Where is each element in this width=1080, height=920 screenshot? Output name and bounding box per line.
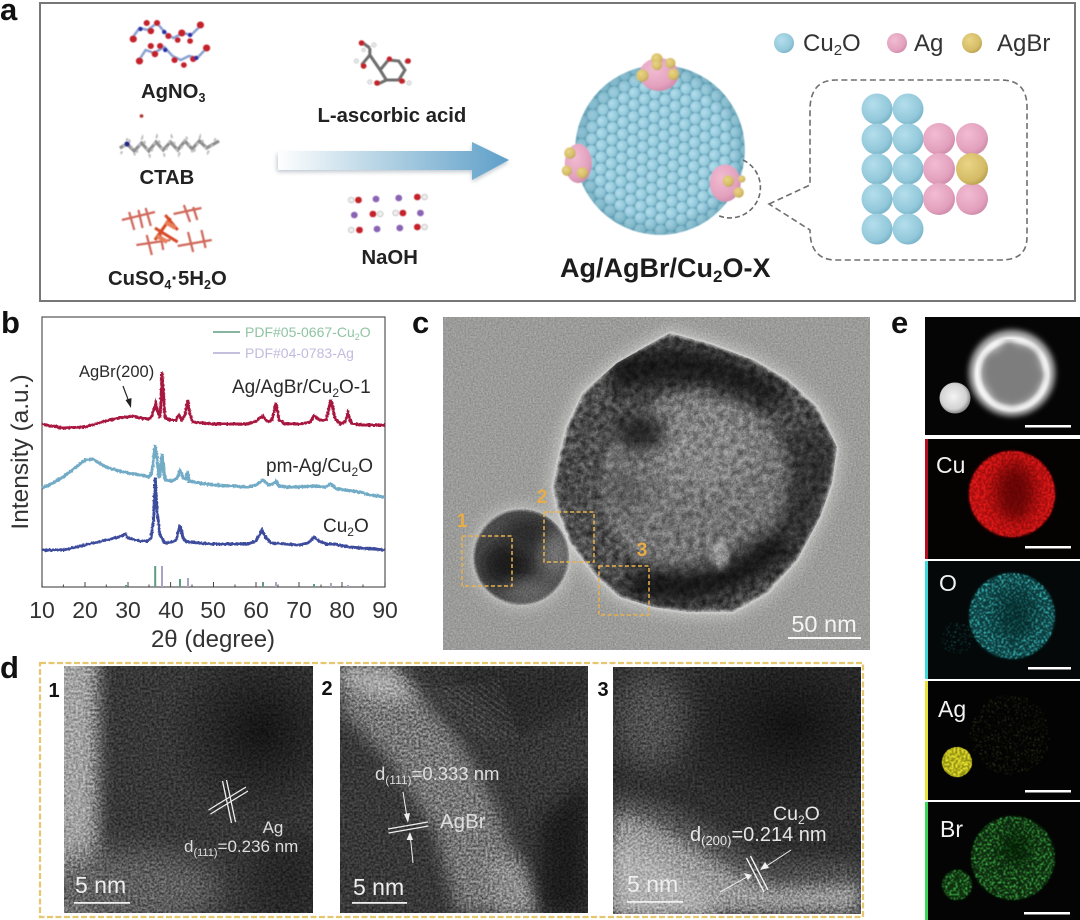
sticks: Cu2O reference (126, 566, 314, 587)
label: d spacing 0.333 nm: =0.333 nm (412, 763, 499, 784)
region box 3: 3 (637, 540, 647, 561)
x axis labels: 90 (372, 597, 398, 623)
legend: Cu2O: O (842, 30, 861, 57)
map: Ag (925, 681, 1080, 800)
annotation: AgBr(200) peak: AgBr(200) (79, 363, 154, 381)
curve label: pm-Ag/Cu2O: 2 (352, 465, 359, 479)
label: CuSO4 5H2O: ·5H (171, 268, 204, 290)
x axis labels: 50 (200, 597, 226, 623)
map: O (925, 561, 1080, 679)
label: CuSO4 5H2O: CuSO (108, 268, 164, 290)
lattice: Ag atoms (923, 123, 988, 215)
curve: Ag/AgBr/Cu2O-1 (42, 372, 385, 428)
lattice: AgBr atom (956, 153, 988, 185)
x axis labels (29, 597, 398, 623)
HRTEM image 3: Cu2O (613, 667, 861, 914)
scale bar: image 2: 5 nm (353, 874, 404, 900)
HAADF image (925, 317, 1080, 436)
x axis ticks (42, 582, 385, 587)
legend: PDF Cu2O: O (360, 324, 371, 340)
Ag domain: top (636, 53, 679, 91)
legend: Cu2O: 2 (834, 42, 842, 59)
map: Cu: Cu (936, 452, 965, 478)
panel b: XRD chart (1, 305, 398, 653)
x axis labels: 10 (29, 597, 55, 623)
molecule: AgNO3 (130, 20, 210, 68)
label: L-ascorbic acid: L-ascorbic acid (318, 105, 466, 127)
map: O: O (939, 570, 957, 596)
map: Ag: Ag (938, 696, 966, 722)
label: d spacing 0.333 nm: (111) (385, 773, 412, 787)
curve label: Ag/AgBr/Cu2O-1: O-1 (339, 377, 371, 398)
curve: pm-Ag/Cu2O (42, 445, 385, 497)
label: image 2: 2 (321, 678, 333, 700)
scale bar: image 3: 5 nm (627, 871, 678, 897)
x axis labels: 30 (115, 597, 141, 623)
annotation: AgBr(200) peak (79, 363, 154, 408)
curve label: Cu2O: Cu (323, 516, 347, 537)
legend: AgBr (962, 30, 1050, 57)
label: d spacing 0.236 nm: d (184, 837, 193, 856)
sphere: Ag/AgBr/Cu2O particle (562, 53, 745, 235)
label: Ag/AgBr/Cu2O-X: 2 (713, 267, 722, 286)
legend: PDF Cu2O: 2 (355, 332, 360, 342)
label: Ag phase: Ag (263, 818, 283, 837)
TEM micrograph (443, 317, 870, 650)
legend: PDF Cu2O: PDF#05-0667-Cu (245, 324, 355, 340)
label: AgNO3: AgNO (141, 81, 198, 103)
panel d letter: d (0, 650, 19, 685)
label: CuSO4 5H2O: 4 (164, 278, 171, 292)
arrow: reaction direction (277, 142, 509, 182)
region box 1 (457, 511, 512, 586)
scale bar: image 1: 5 nm (75, 872, 126, 898)
label: d spacing 0.236 nm: (111) (193, 847, 218, 859)
map: Br (925, 802, 1080, 920)
label: NaOH: NaOH (362, 247, 418, 269)
panel b letter: b (1, 305, 20, 340)
plot frame (42, 317, 385, 587)
label: image 3: 3 (597, 679, 609, 701)
map: Cu (925, 439, 1080, 559)
label: Ag/AgBr/Cu2O-X: O-X (722, 253, 770, 283)
legend: Ag: Ag (914, 30, 943, 57)
legend (774, 30, 1050, 59)
panel e: elemental maps (891, 305, 1080, 920)
molecule: L-ascorbic acid (354, 40, 411, 86)
dashed surround (40, 663, 863, 917)
label: CuSO4 5H2O: O (211, 268, 227, 290)
sticks: Ag reference (162, 566, 348, 587)
molecule: NaOH (348, 194, 427, 233)
Ag domain: right (710, 164, 745, 202)
region box 3 (599, 540, 649, 615)
x axis labels: 80 (329, 597, 355, 623)
panel d: HRTEM images (1, 656, 864, 918)
Ag domain: left (562, 144, 592, 183)
lattice: Cu2O atoms (862, 94, 924, 244)
legend: Cu2O (774, 30, 861, 59)
x axis labels: 70 (286, 597, 312, 623)
small Ag particle (473, 509, 569, 605)
region box 1: 1 (457, 511, 468, 532)
reference sticks (126, 566, 348, 587)
label: Cu2O phase: 2 (798, 813, 805, 827)
scale bar: 50 nm: 50 nm (791, 611, 857, 637)
label: Ag/AgBr/Cu2O-X: Ag/AgBr/Cu (560, 253, 713, 283)
curve label: Cu2O: O (354, 516, 369, 537)
HRTEM image 1: Ag (64, 666, 313, 913)
label: d spacing 0.214 nm: (200) (701, 833, 731, 848)
label: d spacing 0.333 nm: d (375, 763, 385, 784)
legend: PDF Ag: PDF#04-0783-Ag (245, 345, 354, 361)
HRTEM image 2: AgBr (340, 666, 588, 913)
callout: magnified lattice (769, 80, 1027, 260)
curve label: Ag/AgBr/Cu2O-1: 2 (332, 386, 339, 400)
curve label: pm-Ag/Cu2O: pm-Ag/Cu (266, 456, 352, 477)
lattice marker: Ag (208, 780, 248, 823)
legend: PDF Cu2O (213, 324, 371, 342)
panel c letter: c (412, 305, 429, 340)
y axis title: Intensity (a.u.) (7, 374, 34, 530)
region box 2 (537, 487, 594, 562)
large hollow particle (553, 333, 837, 613)
legend: Cu2O: Cu (803, 30, 834, 57)
panel c: TEM image (412, 305, 870, 650)
film grain (443, 317, 870, 650)
x axis labels: 40 (158, 597, 184, 623)
panel a frame (40, 3, 1075, 301)
x axis labels: 60 (243, 597, 269, 623)
curve: Cu2O (42, 478, 385, 550)
label: Cu2O phase: Cu (773, 803, 798, 825)
label: AgBr phase: AgBr (440, 810, 486, 833)
map: Br: Br (940, 816, 963, 842)
label: CTAB: CTAB (140, 167, 194, 189)
panel e letter: e (891, 305, 908, 340)
region box 2: 2 (537, 487, 547, 508)
molecule: CTAB (120, 114, 219, 156)
lattice marker: Cu2O (720, 850, 791, 892)
x axis labels: 20 (72, 597, 98, 623)
legend: AgBr: AgBr (997, 30, 1050, 57)
zoom circle around Ag domain (717, 160, 760, 218)
curve label: pm-Ag/Cu2O: O (358, 456, 373, 477)
label: d spacing 0.236 nm: =0.236 nm (218, 837, 298, 856)
label: d spacing 0.214 nm: d (690, 824, 701, 846)
label: image 1: 1 (48, 680, 60, 702)
label: Cu2O phase: O (805, 803, 820, 825)
label: d spacing 0.214 nm: =0.214 nm (731, 824, 827, 846)
legend: Ag (887, 30, 943, 57)
x axis title: 2θ (degree) (151, 626, 275, 653)
curve label: Ag/AgBr/Cu2O-1: Ag/AgBr/Cu (232, 377, 332, 398)
lattice marker: AgBr (388, 792, 428, 863)
curve label: Cu2O: 2 (347, 525, 354, 539)
panel a: synthesis schematic (0, 0, 1075, 301)
molecule: CuSO4 5H2O (122, 205, 212, 255)
label: AgNO3: 3 (198, 91, 205, 105)
label: CuSO4 5H2O: 2 (204, 278, 211, 292)
